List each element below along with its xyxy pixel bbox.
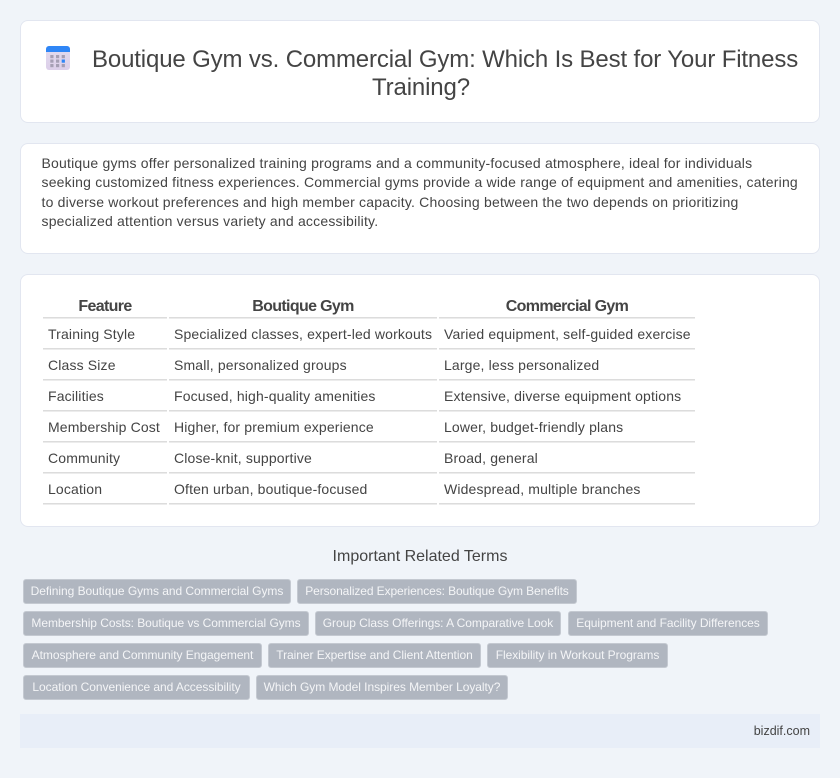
title xyxy=(92,46,798,101)
tag: Personalized Experiences: Boutique Gym Benefits xyxy=(305,584,569,598)
panel: comparison table card xyxy=(20,274,820,527)
row: location: Often urban, boutique-focused xyxy=(174,481,367,497)
tag xyxy=(268,643,481,668)
table header: Commercial Gym xyxy=(506,298,628,315)
row: class size: Class Size xyxy=(48,357,116,373)
row: community: Broad, general xyxy=(444,450,538,466)
row: facilities: Focused, high-quality amenities xyxy=(174,388,376,404)
title: Boutique Gym vs. Commercial Gym: Which Is Best for Your Fitness xyxy=(92,46,798,73)
row: facilities xyxy=(48,388,681,404)
table header: Boutique Gym xyxy=(252,298,354,315)
row: community: Close-knit, supportive xyxy=(174,450,312,466)
tag xyxy=(568,611,768,636)
row: membership cost: Lower, budget-friendly plans xyxy=(444,419,623,435)
tag xyxy=(23,643,262,668)
intro text: seeking customized fitness experiences. Commercial gyms provide a wide range of equipment and amenities, catering xyxy=(42,174,798,190)
row: location: Location xyxy=(48,481,102,497)
footer bar xyxy=(20,714,820,748)
table header xyxy=(78,298,628,315)
tag: Atmosphere and Community Engagement xyxy=(32,648,253,662)
row: class size xyxy=(48,357,599,373)
comparison table xyxy=(43,298,695,505)
tag xyxy=(315,611,561,636)
intro text: to diverse workout preferences and high member capacity. Choosing between the two depends on prioritizing xyxy=(42,194,739,210)
row: community xyxy=(48,450,538,466)
row: facilities: Extensive, diverse equipment options xyxy=(444,388,681,404)
tag list: related terms xyxy=(23,579,768,700)
row: membership cost: Higher, for premium experience xyxy=(174,419,374,435)
panel: title card xyxy=(20,20,820,123)
intro text: specialized attention versus variety and accessibility. xyxy=(42,213,378,229)
row: class size: Large, less personalized xyxy=(444,357,599,373)
tag xyxy=(23,675,250,700)
row: facilities: Facilities xyxy=(48,388,104,404)
row: training style xyxy=(48,326,691,342)
tag: Location Convenience and Accessibility xyxy=(32,680,241,694)
row: location: Widespread, multiple branches xyxy=(444,481,641,497)
row: membership cost: Membership Cost xyxy=(48,419,160,435)
tag xyxy=(23,579,291,604)
tag: Equipment and Facility Differences xyxy=(576,616,760,630)
tag xyxy=(23,611,309,636)
row: community: Community xyxy=(48,450,120,466)
tag: Which Gym Model Inspires Member Loyalty? xyxy=(264,680,500,694)
footer site credit: bizdif.com xyxy=(754,724,810,738)
row: location xyxy=(48,481,641,497)
tag: Group Class Offerings: A Comparative Look xyxy=(323,616,553,630)
row: training style: Training Style xyxy=(48,326,135,342)
row: class size: Small, personalized groups xyxy=(174,357,347,373)
intro text: Boutique gyms offer personalized training programs and a community-focused atmosphere, ideal for individuals xyxy=(42,155,752,171)
row: membership cost xyxy=(48,419,623,435)
table header: Feature xyxy=(78,298,132,315)
heading: important related terms: Important Related Terms xyxy=(333,548,507,565)
icon: calendar xyxy=(46,46,70,70)
panel: introduction card xyxy=(20,143,820,254)
title: Training? xyxy=(372,74,470,101)
intro text xyxy=(42,155,798,229)
tag: Defining Boutique Gyms and Commercial Gyms xyxy=(31,584,283,598)
row: training style: Varied equipment, self-guided exercise xyxy=(444,326,691,342)
tag: Flexibility in Workout Programs xyxy=(496,648,659,662)
tag: Trainer Expertise and Client Attention xyxy=(276,648,473,662)
tag xyxy=(487,643,668,668)
tag xyxy=(256,675,508,700)
row: training style: Specialized classes, expert-led workouts xyxy=(174,326,432,342)
tag: Membership Costs: Boutique vs Commercial Gyms xyxy=(31,616,301,630)
tag xyxy=(297,579,577,604)
